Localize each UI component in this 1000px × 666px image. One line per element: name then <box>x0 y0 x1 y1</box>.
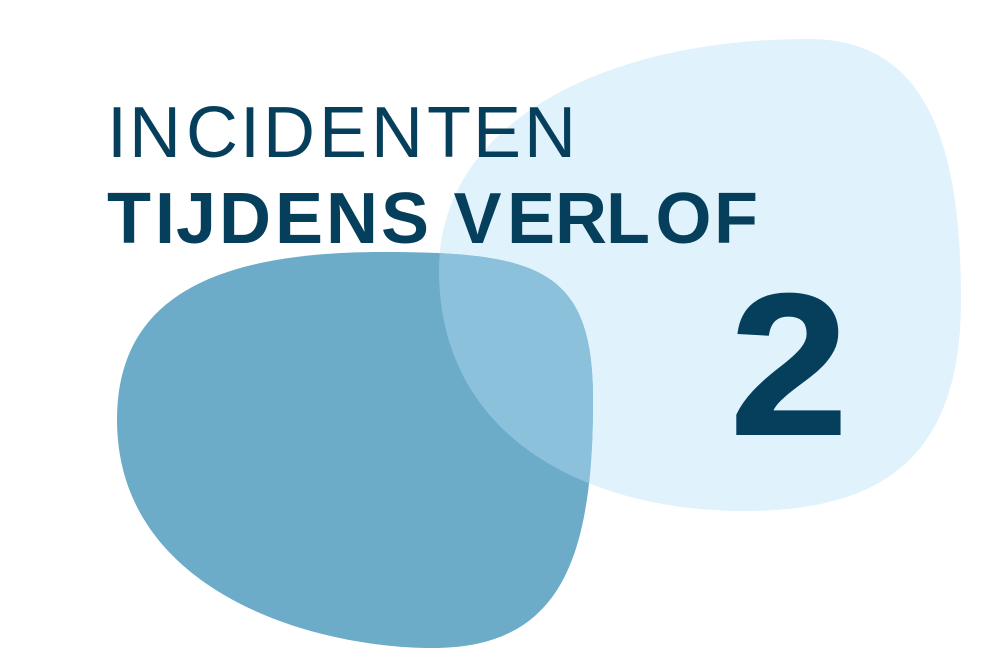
number 2: 2 <box>730 252 848 477</box>
shape: blob overlap <box>439 253 593 484</box>
title line 2: TIJDENS VERLOF <box>107 179 758 259</box>
infographic canvas <box>108 39 961 648</box>
title line 1: INCIDENTEN <box>107 93 576 173</box>
shape: light blue blob <box>439 39 961 511</box>
shape: medium blue blob <box>117 252 593 648</box>
